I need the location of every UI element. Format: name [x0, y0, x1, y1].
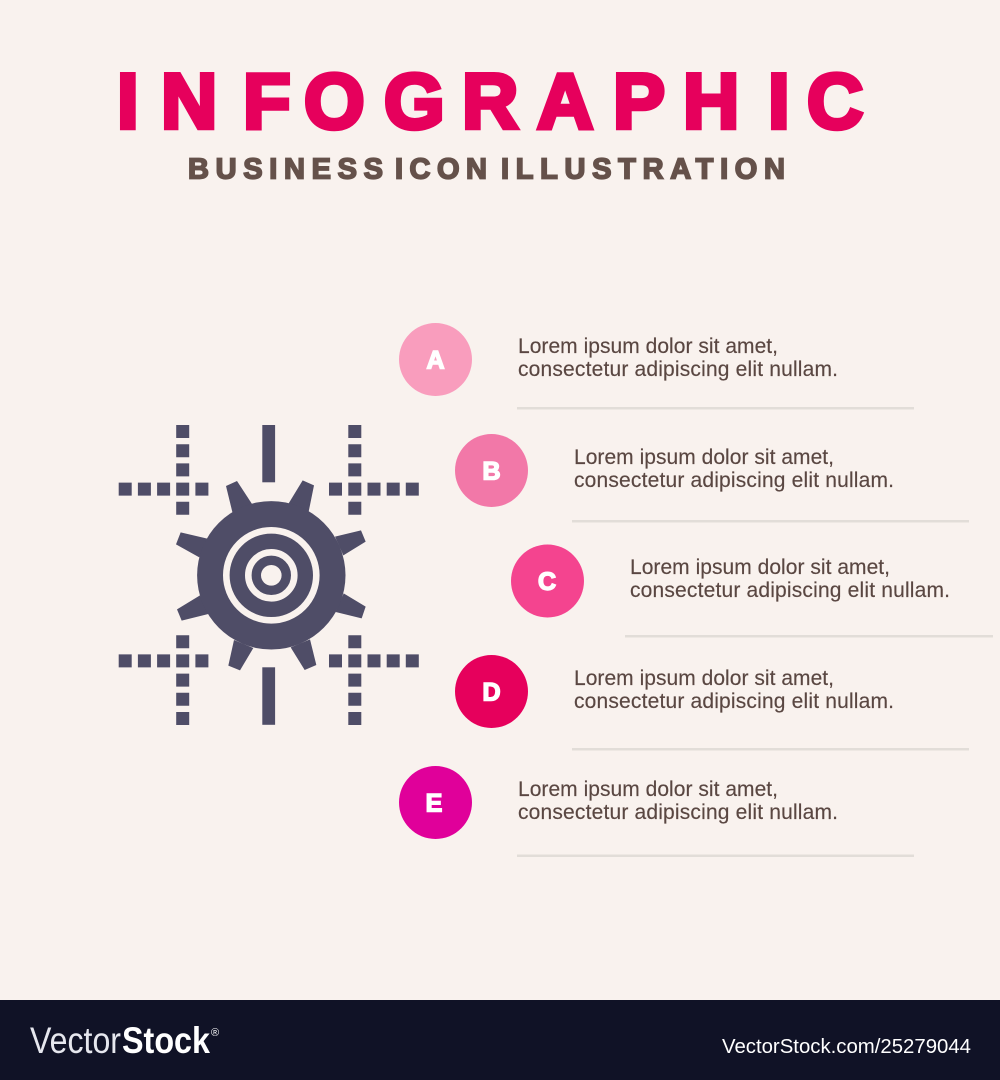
badge D: D [482, 678, 501, 706]
footer url: VectorStock.com/25279044 [722, 1036, 971, 1058]
subtitle [188, 154, 785, 186]
badge B: B [482, 458, 501, 486]
title: INFOGRAPHIC [117, 57, 863, 145]
icon: bottom-left dotted cross [119, 635, 208, 725]
subtitle: ILLUSTRATION [501, 154, 785, 186]
text B: Lorem ipsum dolor sit amet, [574, 446, 834, 469]
badge E: E [426, 790, 442, 818]
badge A: A [426, 346, 445, 374]
icon: bottom bar [262, 667, 275, 725]
footer bar [0, 1000, 1000, 1080]
footer logo: Stock [122, 1020, 210, 1061]
step E [399, 766, 914, 857]
icon: gear inner ring [248, 552, 294, 598]
step B [455, 434, 969, 522]
badge B [455, 434, 528, 507]
footer registered mark: ® [211, 1027, 219, 1039]
icon: bottom-right dotted cross [329, 635, 419, 725]
step C [511, 544, 993, 638]
badge A [399, 323, 472, 396]
icon: gear centre hole [261, 565, 282, 586]
badge C: C [538, 568, 556, 596]
text E: Lorem ipsum dolor sit amet, [518, 778, 778, 801]
icon: top-right dotted cross [329, 425, 419, 515]
icon: gear with crosshair grid [119, 425, 419, 725]
subtitle: ICON [395, 154, 487, 186]
text D: consectetur adipiscing elit nullam. [574, 690, 894, 713]
text E [518, 778, 838, 824]
step A [399, 323, 914, 410]
badge D [455, 655, 528, 728]
text C [630, 556, 950, 602]
footer logo: Vector [30, 1020, 121, 1061]
text A: consectetur adipiscing elit nullam. [518, 358, 838, 381]
icon: top bar [262, 425, 275, 482]
text A [518, 335, 838, 381]
text C: Lorem ipsum dolor sit amet, [630, 556, 890, 579]
text D [574, 667, 894, 713]
icon: gear outer ring [226, 530, 316, 620]
text B: consectetur adipiscing elit nullam. [574, 469, 894, 492]
text B [574, 446, 894, 492]
icon: gear body [197, 501, 346, 650]
step D [455, 655, 969, 750]
badge E [399, 766, 472, 839]
text E: consectetur adipiscing elit nullam. [518, 801, 838, 824]
subtitle: BUSINESS [188, 154, 383, 186]
text A: Lorem ipsum dolor sit amet, [518, 335, 778, 358]
icon: gear teeth [176, 480, 366, 670]
text D: Lorem ipsum dolor sit amet, [574, 667, 834, 690]
footer logo [30, 1020, 210, 1061]
badge C [511, 544, 584, 618]
text C: consectetur adipiscing elit nullam. [630, 579, 950, 602]
icon: top-left dotted cross [119, 425, 208, 515]
